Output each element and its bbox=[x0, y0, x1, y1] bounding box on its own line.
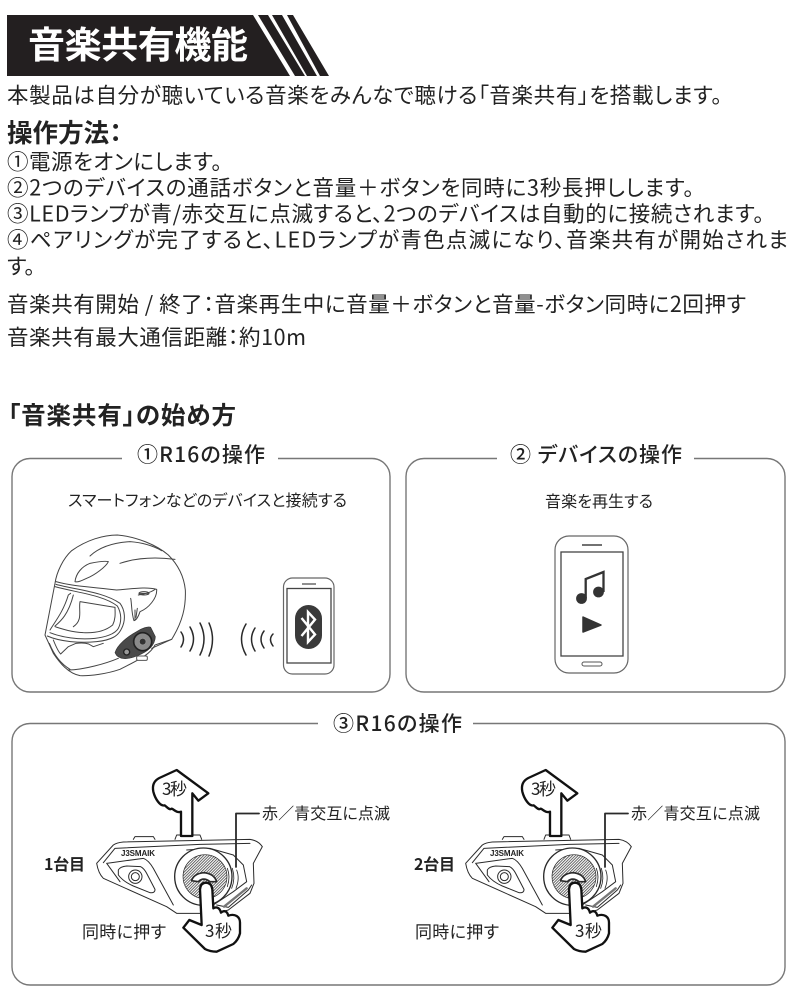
label: bottom 3 seconds: 3秒 bbox=[205, 917, 232, 942]
second unit diagram bbox=[414, 770, 760, 952]
panel heading: step 2: ② デバイスの操作 bbox=[510, 439, 682, 469]
hand pressing top button bbox=[153, 770, 208, 836]
title banner: 音楽共有機能 bbox=[28, 15, 248, 69]
icon: helmet with intercom bbox=[45, 535, 185, 676]
icon: phone playing music bbox=[555, 536, 628, 673]
panel heading: step 1: ①R16の操作 bbox=[137, 439, 265, 469]
hand pressing centre button two bbox=[552, 883, 609, 952]
label: LED alternate flash: 赤／青交互に点滅 bbox=[262, 800, 390, 824]
logo text on device two: J3SMAIK bbox=[490, 849, 524, 858]
label: 2nd unit: 2台目 bbox=[414, 851, 455, 875]
hand pressing top button two bbox=[522, 770, 577, 836]
panel: device operation, play music bbox=[406, 439, 785, 692]
icon: sound waves from phone bbox=[242, 624, 273, 655]
panel: R16 operation, pairing with device bbox=[12, 439, 390, 692]
panel caption: 音楽を再生する bbox=[545, 488, 653, 512]
intercom device one bbox=[97, 835, 262, 913]
label: press simultaneously two: 同時に押す bbox=[415, 918, 499, 943]
sharing start and stop note: 音楽共有開始 / 終了：音楽再生中に音量＋ボタンと音量-ボタン同時に2回押す bbox=[7, 288, 746, 319]
maximum distance note: 音楽共有最大通信距離：約10m bbox=[7, 321, 306, 352]
icon: phone with bluetooth bbox=[284, 578, 334, 674]
operation steps: ③LEDランプが青/赤交互に点滅すると、2つのデバイスは自動的に接続されます。 bbox=[7, 198, 764, 228]
intercom on helmet bbox=[115, 627, 155, 660]
section heading: 「音楽共有」の始め方 bbox=[8, 397, 236, 432]
intro text: 本製品は自分が聴いている音楽をみんなで聴ける「音楽共有」を搭載します。 bbox=[7, 79, 722, 110]
intercom device two bbox=[466, 835, 631, 913]
operation steps: ②2つのデバイスの通話ボタンと音量＋ボタンを同時に3秒長押しします。 bbox=[7, 172, 694, 202]
operation steps bbox=[7, 113, 788, 281]
panel: R16 operation, simultaneous press bbox=[12, 708, 785, 985]
label: top 3 seconds: 3秒 bbox=[162, 775, 187, 800]
title banner bbox=[7, 15, 329, 76]
operation steps: 操作方法： bbox=[7, 113, 122, 150]
label: LED alternate flash two: 赤／青交互に点滅 bbox=[631, 800, 760, 824]
label: bottom 3 seconds two: 3秒 bbox=[575, 917, 602, 942]
hand pressing centre button bbox=[183, 883, 240, 952]
label: 1st unit: 1台目 bbox=[44, 851, 85, 875]
panel caption: スマートフォンなどのデバイスと接続する bbox=[68, 487, 347, 511]
label: top 3 seconds two: 3秒 bbox=[531, 775, 556, 800]
operation steps: す。 bbox=[7, 250, 35, 281]
logo text on device: J3SMAIK bbox=[121, 849, 155, 858]
panel heading: step 3: ③R16の操作 bbox=[333, 708, 462, 738]
pointer line to LED bbox=[236, 814, 259, 867]
operation steps: ①電源をオンにします。 bbox=[7, 146, 222, 176]
first unit diagram bbox=[44, 770, 390, 952]
pointer line to LED two bbox=[605, 814, 628, 867]
icon: sound waves from helmet bbox=[181, 623, 212, 656]
operation steps: ④ペアリングが完了すると、LEDランプが青色点滅になり、音楽共有が開始されま bbox=[7, 224, 788, 254]
label: press simultaneously: 同時に押す bbox=[82, 918, 166, 943]
